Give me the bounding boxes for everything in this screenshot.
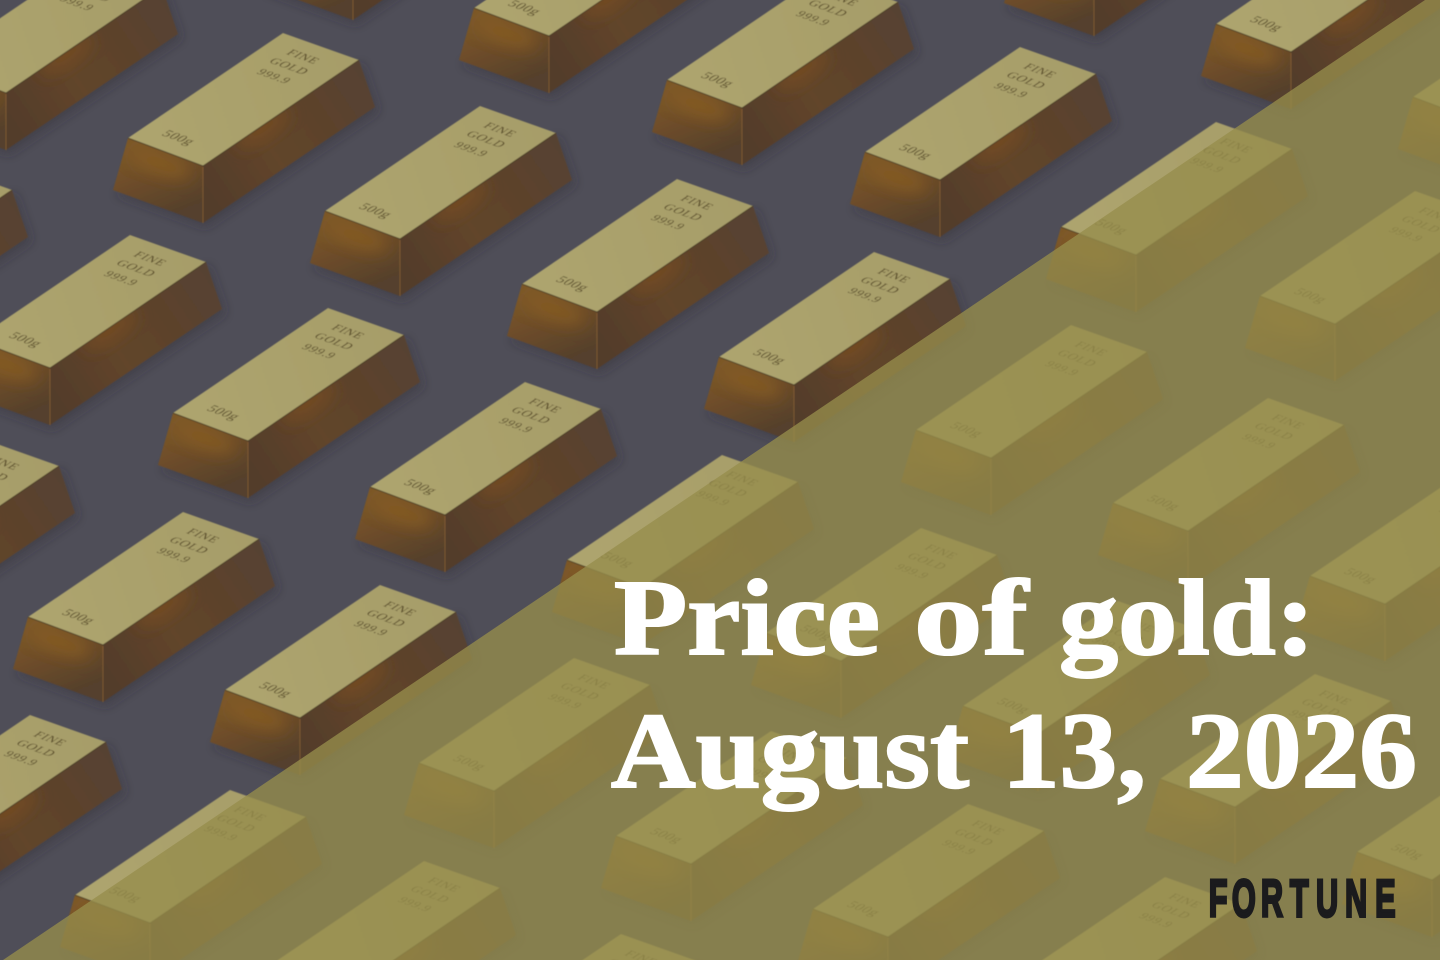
gold bar: GOLD	[213, 813, 260, 834]
gold bar: FINE	[424, 876, 465, 894]
gold bar	[1004, 0, 1269, 40]
gold bar: FINE	[283, 48, 324, 66]
gold bar	[652, 0, 917, 169]
gold bar: 500g	[795, 624, 836, 642]
gold bar: GOLD	[13, 738, 60, 759]
title	[611, 559, 1417, 811]
gold bar: 500g	[645, 827, 686, 845]
gold bar: 500g	[748, 348, 789, 366]
gold bar: FINE	[1315, 689, 1356, 707]
gold bar: FINE	[921, 543, 962, 561]
gold bar: 999.9	[844, 286, 886, 305]
gold bar: 999.9	[100, 269, 142, 288]
gold bar: GOLD	[508, 405, 555, 426]
gold bar: 999.9	[1385, 225, 1427, 244]
gold bar: 500g	[894, 143, 935, 161]
gold bar: GOLD	[951, 827, 998, 848]
gold bar	[0, 235, 225, 429]
gold bar: GOLD	[311, 331, 358, 352]
gold bar	[1342, 747, 1440, 941]
gold bar: FINE	[677, 194, 718, 212]
gold bar: 999.9	[350, 619, 392, 638]
gold bar: 500g	[1245, 15, 1286, 33]
title: Price	[614, 559, 880, 678]
gold bar: 999.9	[1088, 635, 1130, 654]
gold bar: 500g	[992, 697, 1033, 715]
gold bar: 999.9	[1041, 359, 1083, 378]
gold bar: 999.9	[544, 692, 586, 711]
gold bar: 999.9	[253, 67, 295, 86]
gold bar: GOLD	[1199, 145, 1246, 166]
gold bar	[355, 382, 620, 576]
gold bar: FINE	[480, 121, 521, 139]
gold bar: GOLD	[754, 754, 801, 775]
gold bar	[1201, 0, 1440, 113]
gold bar: 500g	[399, 478, 440, 496]
title: August	[611, 692, 969, 811]
gold bar: 500g	[1386, 843, 1427, 861]
gold bar: GOLD	[660, 202, 707, 223]
gold bar: FINE	[525, 397, 566, 415]
gold bar: 999.9	[938, 838, 980, 857]
gold bar	[1398, 0, 1440, 186]
gold bar: 500g	[945, 421, 986, 439]
gold bar	[901, 325, 1166, 519]
gold bar	[948, 601, 1213, 795]
gold bar	[1046, 122, 1311, 316]
gold bar: 500g	[551, 275, 592, 293]
gold bar: 999.9	[298, 342, 340, 361]
gold bar	[254, 861, 519, 960]
gold bar: GOLD	[705, 478, 752, 499]
gold bar	[60, 790, 325, 960]
gold bar: 500g	[1142, 494, 1183, 512]
gold bar: 500g	[448, 754, 489, 772]
gold bar: FINE	[30, 730, 71, 748]
gold bar: 999.9	[450, 140, 492, 159]
gold bar: GOLD	[266, 56, 313, 77]
gold bar: FINE	[1268, 413, 1309, 431]
gold bar	[704, 252, 969, 446]
gold bar	[451, 934, 716, 960]
gold bar: 500g	[1339, 567, 1380, 585]
gold bar: 500g	[696, 71, 737, 89]
gold bar: 999.9	[153, 546, 195, 565]
gold bar: GOLD	[407, 884, 454, 905]
gold bar: FINE	[1216, 137, 1257, 155]
gold bar	[1098, 398, 1363, 592]
gold bar: 500g	[4, 331, 45, 349]
gold bar: 999.9	[1135, 911, 1177, 930]
gold bar: 999.9	[990, 81, 1032, 100]
gold bar: FINE	[1071, 340, 1112, 358]
gold bar: 500g	[596, 551, 637, 569]
gold bar	[13, 512, 278, 706]
gold bar	[798, 804, 1063, 960]
gold bar: 999.9	[1186, 156, 1228, 175]
gold bar: GOLD	[463, 129, 510, 150]
gold bar: GOLD	[166, 535, 213, 556]
gold bar: FINE	[230, 805, 271, 823]
gold bar: GOLD	[1251, 421, 1298, 442]
gold bar: FINE	[328, 323, 369, 341]
gold bar: 500g	[202, 404, 243, 422]
gold bar: FINE	[771, 746, 812, 764]
gold bar: 500g	[842, 900, 883, 918]
gold bar	[1145, 674, 1410, 868]
gold bar: FINE	[574, 673, 615, 691]
gold bar: FINE	[130, 250, 171, 268]
gold bar	[552, 455, 817, 649]
gold bar: GOLD	[557, 681, 604, 702]
gold bar	[507, 179, 772, 373]
gold bar: FINE	[380, 600, 421, 618]
gold bar	[310, 106, 575, 300]
gold bar: GOLD	[363, 608, 410, 629]
gold bar	[263, 0, 528, 24]
gold bar	[158, 308, 423, 502]
gold bar: FINE	[968, 819, 1009, 837]
gold bar: 500g	[57, 608, 98, 626]
gold bar	[601, 731, 866, 925]
gold bar: GOLD	[1003, 70, 1050, 91]
gold bar: 999.9	[1238, 432, 1280, 451]
gold bar: GOLD	[1054, 348, 1101, 369]
gold bar	[0, 0, 181, 154]
gold bar: 500g	[254, 681, 295, 699]
gold bar: FINE	[183, 527, 224, 545]
gold bar: FINE	[1020, 62, 1061, 80]
gold bar	[751, 528, 1016, 722]
gold bar	[210, 585, 475, 779]
gold bar: 999.9	[200, 824, 242, 843]
gold bar: 500g	[1189, 770, 1230, 788]
gold bar: 500g	[1289, 287, 1330, 305]
gold bar: 999.9	[495, 416, 537, 435]
gold bar: GOLD	[1298, 697, 1345, 718]
gold bar: GOLD	[1148, 900, 1195, 921]
gold bar: GOLD	[1101, 624, 1148, 645]
gold bar	[113, 33, 378, 227]
gold bar: 500g	[354, 202, 395, 220]
gold bar	[1245, 191, 1440, 385]
gold bar: FINE	[722, 470, 763, 488]
title: of	[914, 559, 1031, 678]
gold bar	[995, 877, 1260, 960]
gold bar	[850, 47, 1115, 241]
gold bar	[0, 163, 31, 357]
gold bar: 500g	[104, 886, 145, 904]
gold bar: 999.9	[394, 895, 436, 914]
gold bar: GOLD	[113, 258, 160, 279]
gold bar: GOLD	[857, 275, 904, 296]
title: 2026	[1186, 692, 1417, 811]
gold bar: FINE	[1118, 616, 1159, 634]
gold bar: 999.9	[0, 749, 42, 768]
gold bar: 999.9	[692, 489, 734, 508]
gold bar: 500g	[1090, 218, 1131, 236]
gold bar: FINE	[1165, 892, 1206, 910]
title: gold:	[1059, 559, 1315, 678]
gold bar: 999.9	[647, 213, 689, 232]
gold bar	[459, 0, 724, 97]
gold bar: 999.9	[1285, 708, 1327, 727]
Fortune logo: FORTUNE	[1209, 870, 1396, 929]
gold bar: 999.9	[792, 9, 834, 28]
gold bar	[0, 715, 125, 909]
gold bar: 999.9	[891, 562, 933, 581]
gold bar	[404, 658, 669, 852]
gold bar: 999.9	[741, 765, 783, 784]
gold bar	[0, 439, 78, 633]
title: 13,	[1002, 692, 1146, 811]
gold bar	[1295, 471, 1440, 665]
gold bar: GOLD	[904, 551, 951, 572]
gold bar: FINE	[874, 267, 915, 285]
gold bar: 500g	[157, 129, 198, 147]
